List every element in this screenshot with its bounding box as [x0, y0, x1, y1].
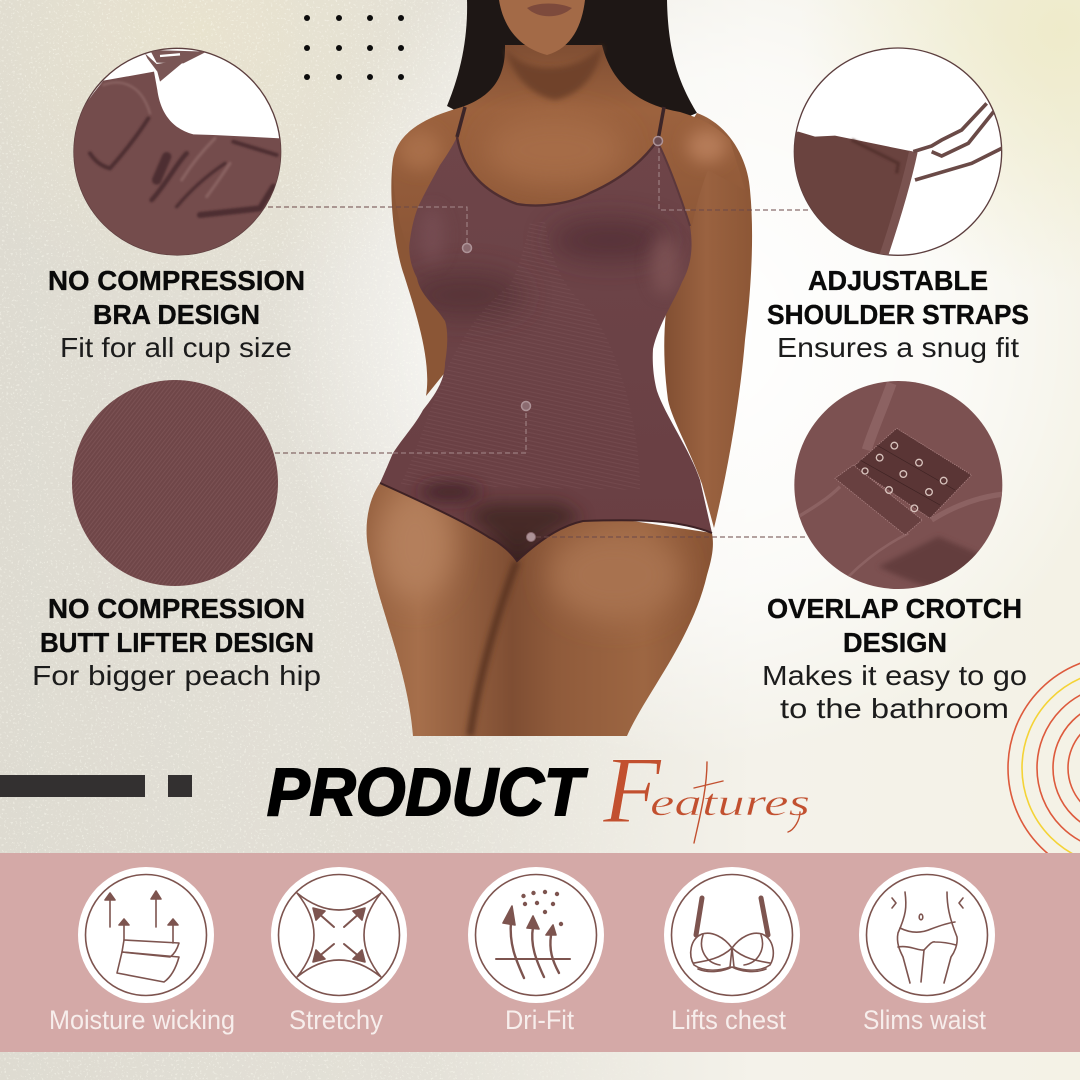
decorative bars [0, 775, 192, 797]
text block: shoulder straps [767, 265, 1029, 363]
hair [447, 0, 697, 120]
feature: slims waist [859, 867, 995, 1035]
text block: overlap crotch: Makes it easy to go [762, 660, 1027, 691]
icon: slims waist [892, 892, 963, 983]
neckline and leg trim [457, 137, 657, 206]
text block: overlap crotch [762, 593, 1027, 724]
callout lines and markers [268, 136, 808, 542]
callout: bra design [268, 207, 472, 252]
text block: butt lifter design [32, 593, 321, 691]
model photo [367, 0, 752, 736]
text block: shoulder straps: Ensures a snug fit [777, 332, 1019, 363]
detail circle: crotch hooks [794, 381, 1012, 597]
feature: slims waist: Slims waist [863, 1005, 986, 1035]
feature: moisture wicking: Moisture wicking [49, 1005, 235, 1035]
feature: stretchy [271, 867, 407, 1035]
text block: butt lifter design: BUTT LIFTER DESIGN [40, 627, 314, 658]
title: PRODUCT [267, 755, 588, 830]
neck shadow [505, 45, 603, 100]
text block: bra design [48, 265, 305, 363]
shoulders and chest [393, 45, 745, 260]
feature: stretchy: Stretchy [289, 1005, 383, 1035]
detail circle: shoulder strap [794, 47, 1002, 256]
feature: dri-fit [468, 867, 604, 1035]
feature: moisture wicking [49, 867, 235, 1035]
title: eatures [650, 782, 810, 824]
callout: shoulder straps [654, 136, 808, 210]
callout: butt lifter [275, 402, 530, 453]
bodysuit [380, 137, 712, 561]
features band [0, 853, 1080, 1052]
shoulder highlights [398, 115, 727, 185]
right arm [660, 113, 752, 528]
text block: bra design: Fit for all cup size [60, 332, 292, 363]
text block: butt lifter design: NO COMPRESSION [48, 593, 305, 624]
lips [527, 4, 572, 16]
icon: dri-fit [496, 890, 570, 978]
text block: overlap crotch: DESIGN [843, 627, 947, 658]
legs [367, 483, 713, 736]
callout: overlap crotch [526, 532, 808, 542]
title [267, 737, 810, 843]
straps [457, 107, 664, 140]
text block: overlap crotch: to the bathroom [780, 693, 1009, 724]
title: F [602, 737, 662, 843]
decorative concentric rings [1008, 656, 1080, 880]
left arm [391, 160, 450, 396]
icon: moisture wicking [105, 891, 179, 982]
text block: bra design: BRA DESIGN [93, 299, 260, 330]
face and chin [499, 0, 585, 55]
text block: shoulder straps: ADJUSTABLE [808, 265, 988, 296]
detail circle: bra fabric [73, 48, 282, 256]
feature: dri-fit: Dri-Fit [505, 1005, 574, 1035]
text block: bra design: NO COMPRESSION [48, 265, 305, 296]
feature: lifts chest: Lifts chest [671, 1005, 786, 1035]
icon: lifts chest [691, 898, 773, 972]
text block: butt lifter design: For bigger peach hip [32, 660, 321, 691]
text block: shoulder straps: SHOULDER STRAPS [767, 299, 1029, 330]
text block: overlap crotch: OVERLAP CROTCH [767, 593, 1022, 624]
title flourish [694, 762, 800, 843]
detail circle: butt lifter fabric [72, 380, 278, 586]
icon: stretchy [297, 893, 381, 977]
feature: lifts chest [664, 867, 800, 1035]
decorative dot grid [304, 15, 404, 80]
